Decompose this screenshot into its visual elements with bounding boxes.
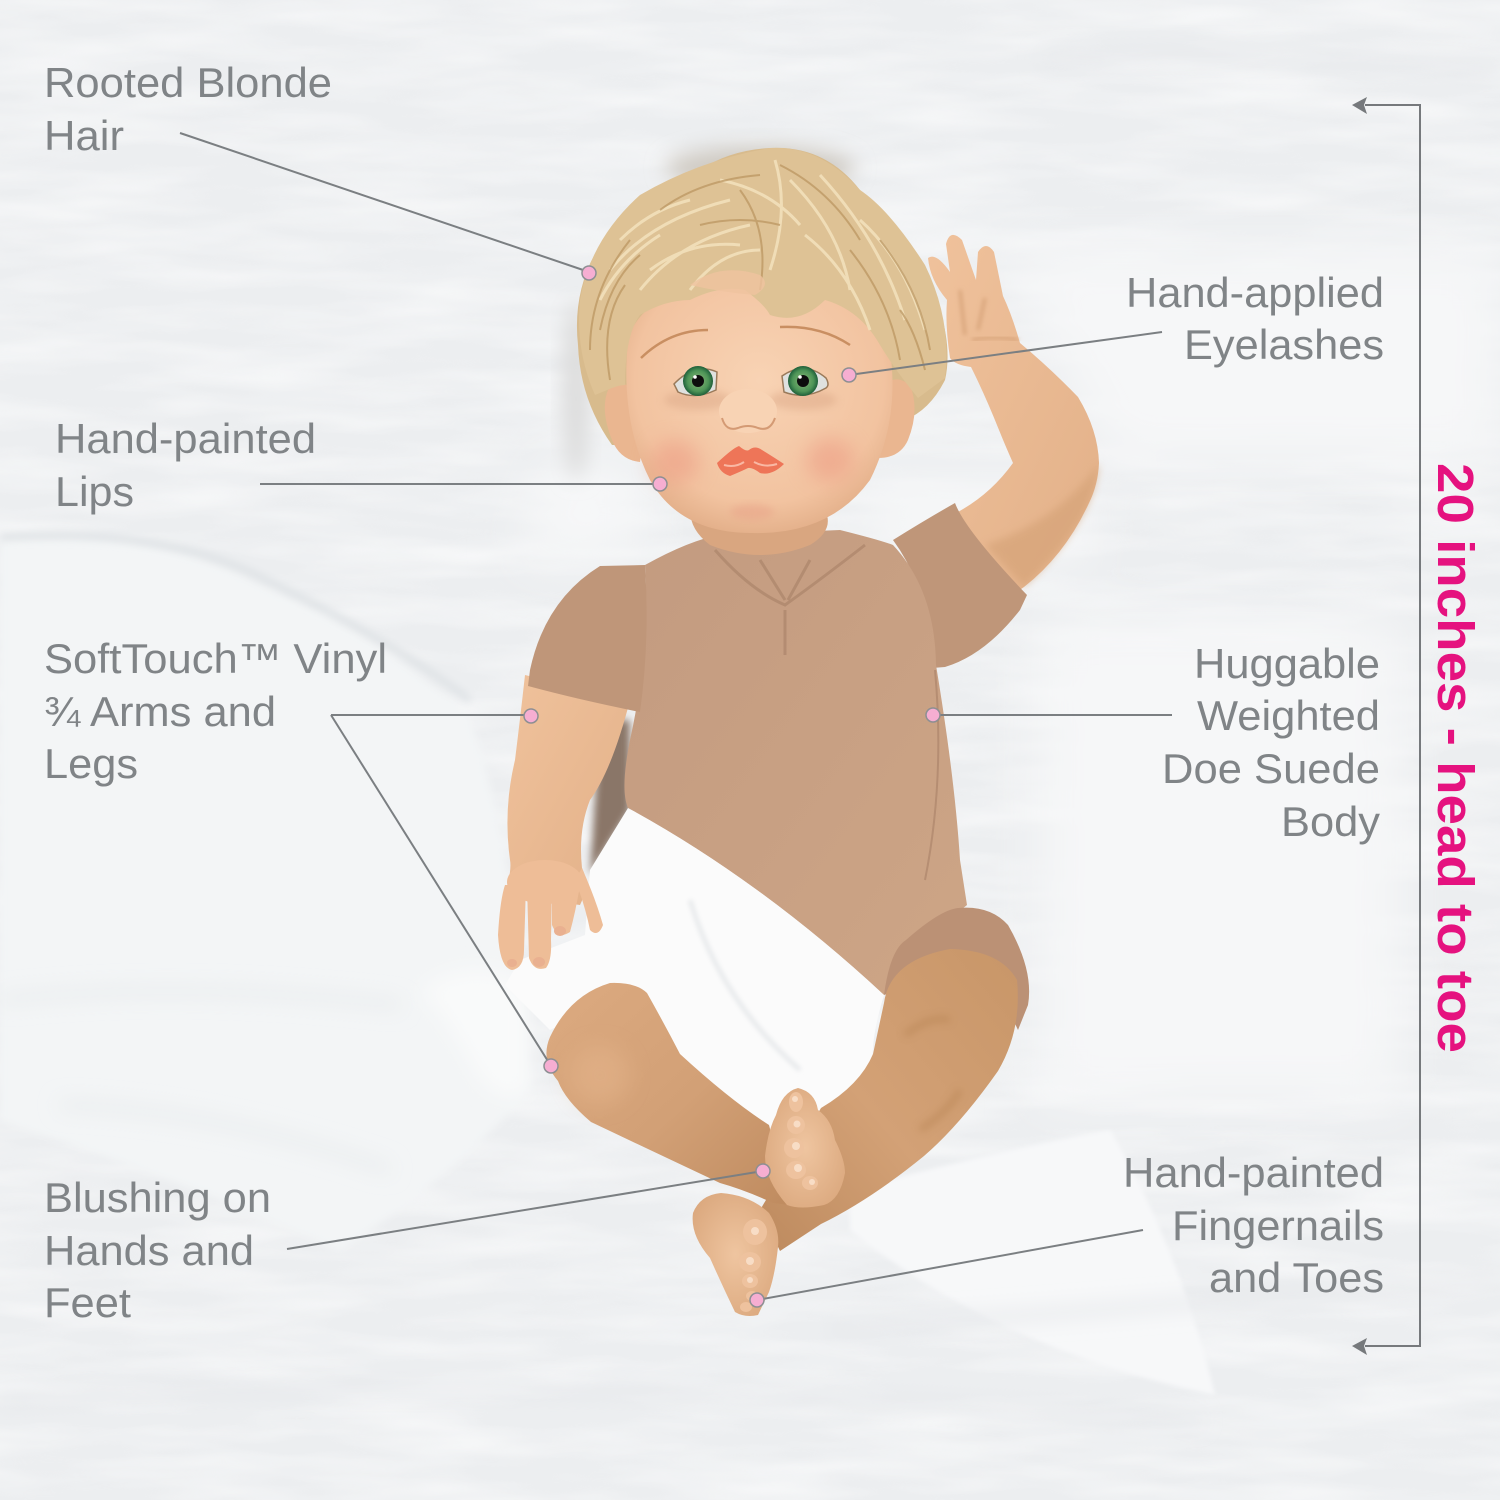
doll: lower foot [693,1193,778,1316]
doll: torso [624,530,967,995]
doll: torso gathering [715,545,938,880]
label: rooted blonde hair: Rooted Blonde [44,59,332,106]
label: rooted blonde hair [44,59,332,159]
label: hand-applied eyelashes: Eyelashes [1184,321,1384,368]
doll: eyebrows [641,327,850,358]
doll: raised arm and hand [928,235,1099,600]
height bracket with arrows [1352,97,1420,1355]
doll: upper foot [765,1088,845,1208]
doll: white swaddle cloth [505,808,884,1160]
label: hand-painted fingernails and toes: Hand-painted [1123,1149,1384,1196]
label: softtouch vinyl arms and legs: ¾ Arms and [44,688,276,735]
label: softtouch vinyl arms and legs: SoftTouch™ Vinyl [44,635,387,682]
doll: left hand fingers [498,860,603,970]
label: hand-painted fingernails and toes [1123,1149,1384,1301]
label: hand-painted fingernails and toes: and Toes [1209,1254,1384,1301]
label: hand-painted lips: Lips [55,468,134,515]
label: softtouch vinyl arms and legs: Legs [44,740,138,787]
height label: 20 inches - head to toe [1427,463,1484,1053]
doll: eye socket shadow [664,390,837,410]
doll: eyes [674,366,828,396]
doll: hair back [577,148,948,445]
doll: left leg [546,983,790,1205]
label: hand-painted lips [55,415,316,515]
leader lines [180,133,1172,1300]
doll: ears [605,379,915,462]
label: softtouch vinyl arms and legs [44,635,387,787]
label: rooted blonde hair: Hair [44,112,124,159]
label: huggable weighted doe suede body: Huggable [1194,640,1380,687]
doll: nose [719,389,777,433]
doll: lips [717,446,784,476]
label: hand-applied eyelashes [1126,269,1384,368]
doll: left arm [498,675,630,970]
label: blushing on hands and feet: Hands and [44,1227,254,1274]
label: hand-applied eyelashes: Hand-applied [1126,269,1384,316]
doll illustration [498,148,1099,1316]
label: huggable weighted doe suede body: Weighted [1197,692,1380,739]
doll: hair fringe [579,148,946,398]
doll: cheeks blush [651,438,854,484]
doll: hand fingernails [507,926,566,967]
doll: hip pad [884,908,1029,1030]
label: huggable weighted doe suede body [1162,640,1380,845]
label: huggable weighted doe suede body: Body [1281,798,1380,845]
label: hand-painted lips: Hand-painted [55,415,316,462]
doll: right leg [760,949,1018,1251]
label: blushing on hands and feet: Feet [44,1279,131,1326]
label: huggable weighted doe suede body: Doe Suede [1162,745,1380,792]
marker dots [524,266,940,1307]
label: blushing on hands and feet [44,1174,271,1326]
label: blushing on hands and feet: Blushing on [44,1174,271,1221]
doll: chin shadow [730,504,774,520]
label: hand-painted fingernails and toes: Fingernails [1172,1202,1384,1249]
doll: left sleeve [528,565,647,712]
doll: right sleeve [893,503,1027,668]
doll: face [626,270,892,533]
doll: neck [690,510,828,555]
